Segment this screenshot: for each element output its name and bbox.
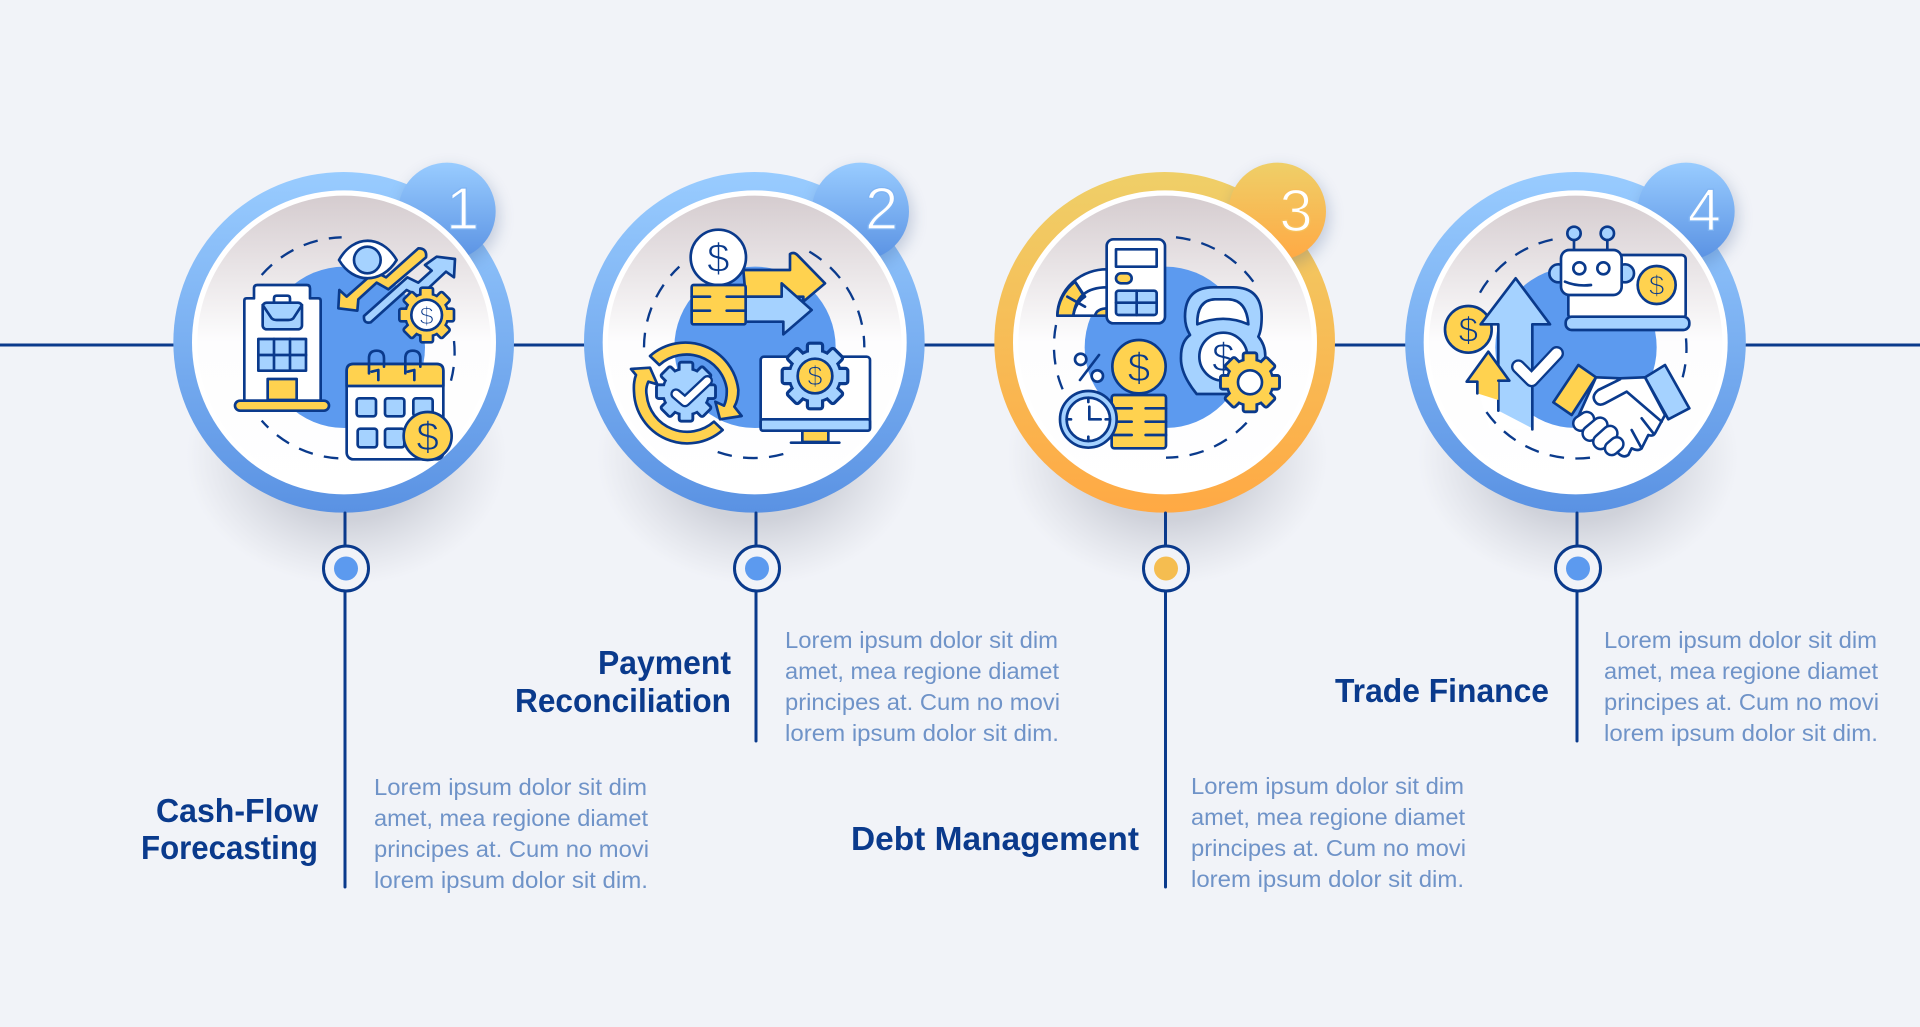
- icon: eye: [339, 241, 397, 278]
- text block: step 3 description: amet, mea regione diamet: [1191, 804, 1466, 830]
- inner disc: [1424, 190, 1728, 494]
- icon: kettlebell with gear: [1181, 287, 1280, 412]
- icon: coin and stack: $: [1128, 344, 1150, 390]
- blue blob: [674, 267, 836, 428]
- text block: step 1 description: Lorem ipsum dolor sit dim: [374, 774, 647, 800]
- icon: handshake: [1553, 365, 1689, 456]
- blue blob: [1495, 267, 1657, 428]
- heading: Cash-Flow Forecasting: [141, 792, 318, 866]
- inner disc: [192, 190, 496, 494]
- text block: step 1 description: amet, mea regione diamet: [374, 805, 649, 831]
- text block: step 3 description: Lorem ipsum dolor sit dim: [1191, 773, 1464, 799]
- heading: Payment Reconciliation: Reconciliation: [515, 682, 731, 719]
- number badge: 4: [1688, 176, 1721, 243]
- icon: robot with laptop: [1549, 227, 1689, 330]
- text block: step 3 description: principes at. Cum no movi: [1191, 835, 1466, 861]
- text block: step 1 description: principes at. Cum no movi: [374, 836, 649, 862]
- blue blob: [264, 267, 425, 428]
- heading: Payment Reconciliation: [515, 644, 731, 719]
- inner disc: [1013, 190, 1317, 494]
- icon: monitor with gear: [761, 343, 870, 443]
- icon: coin and stack: [1112, 340, 1166, 448]
- heading: Cash-Flow Forecasting: Forecasting: [141, 829, 318, 866]
- icon: yellow down arrow: [338, 248, 426, 311]
- white mask of blob under arrows: [1477, 387, 1533, 430]
- number badge: [1229, 163, 1329, 266]
- outer ring: [173, 172, 514, 513]
- text block: step 3 description: [1191, 773, 1466, 892]
- icon: dollar gear: [399, 288, 454, 342]
- icon: light-blue up arrow: [364, 257, 455, 323]
- icon: coin and stack: [691, 230, 746, 324]
- outer ring: [584, 172, 925, 513]
- text block: step 2 description: [785, 627, 1060, 746]
- text block: step 4 description: [1604, 627, 1879, 746]
- text block: step 2 description: amet, mea regione diamet: [785, 658, 1060, 684]
- icon: coin and stack: $: [707, 235, 730, 281]
- text block: step 4 description: principes at. Cum no movi: [1604, 689, 1879, 715]
- number badge: 1: [446, 175, 479, 242]
- text block: step 1 description: lorem ipsum dolor sit dim.: [374, 867, 648, 893]
- dashed orbit: [262, 237, 455, 458]
- connector: step 4 stem and node: [1556, 513, 1600, 741]
- text block: step 4 description: lorem ipsum dolor sit dim.: [1604, 720, 1878, 746]
- icon: big up arrow: [1481, 278, 1550, 429]
- text block: step 1 description: [374, 774, 649, 893]
- heading: Cash-Flow Forecasting: Cash-Flow: [156, 792, 318, 829]
- icon: gauge: [1057, 269, 1108, 316]
- number badge: [812, 163, 912, 266]
- text block: step 4 description: amet, mea regione diamet: [1604, 658, 1879, 684]
- panel: step 2 circle: [584, 163, 925, 585]
- icon: refresh check gear: [631, 343, 742, 443]
- dashed orbit: [644, 252, 864, 458]
- panel: step 3 circle: [994, 163, 1335, 585]
- icon: monitor with gear: $: [807, 361, 823, 392]
- icon: percent sign: [1075, 354, 1103, 382]
- heading: Trade Finance: Trade Finance: [1335, 672, 1549, 709]
- outer ring: [1405, 172, 1746, 513]
- text block: step 3 description: lorem ipsum dolor sit dim.: [1191, 866, 1464, 892]
- icon: dollar gear: $: [420, 302, 434, 330]
- heading: Debt Management: Debt Management: [851, 820, 1139, 857]
- text block: step 4 description: Lorem ipsum dolor sit dim: [1604, 627, 1877, 653]
- dashed orbit: [1480, 239, 1686, 458]
- connector: step 2 stem and node: [734, 513, 780, 741]
- text block: step 2 description: lorem ipsum dolor sit dim.: [785, 720, 1059, 746]
- outer ring: [994, 172, 1335, 513]
- icon: calendar: $: [416, 414, 439, 460]
- connector: step 1 stem and node: [324, 513, 368, 887]
- heading: Payment Reconciliation: Payment: [598, 644, 731, 681]
- icon: coin: $: [1459, 311, 1479, 350]
- icon: kettlebell with gear: $: [1212, 334, 1235, 380]
- connector: step 3 stem and node: [1144, 513, 1188, 887]
- number badge: [1637, 163, 1737, 266]
- number badge: [398, 163, 498, 266]
- text block: step 2 description: principes at. Cum no movi: [785, 689, 1060, 715]
- number badge: 3: [1279, 177, 1312, 244]
- icon: office building: [235, 285, 329, 411]
- icon: small up arrow: [1467, 352, 1509, 400]
- horizontal timeline line: [0, 344, 1920, 346]
- drop shadow: [597, 328, 917, 585]
- drop shadow: [1008, 328, 1328, 585]
- panel: step 1 circle: [173, 163, 514, 585]
- dashed orbit: [1054, 237, 1253, 458]
- blue blob: [1085, 267, 1246, 428]
- icon: check mark: [1518, 353, 1557, 380]
- text block: step 2 description: Lorem ipsum dolor sit dim: [785, 627, 1058, 653]
- panel: step 4 circle: [1405, 163, 1746, 585]
- icon: transfer arrows: [743, 253, 825, 334]
- icon: robot with laptop: $: [1649, 270, 1665, 301]
- icon: coin: [1445, 306, 1492, 353]
- icon: calculator: [1107, 239, 1165, 323]
- drop shadow: [1418, 328, 1738, 585]
- drop shadow: [187, 328, 507, 585]
- icon: clock: [1060, 391, 1117, 448]
- number badge: 2: [865, 175, 898, 242]
- inner disc: [603, 190, 907, 494]
- icon: calendar: [347, 351, 452, 460]
